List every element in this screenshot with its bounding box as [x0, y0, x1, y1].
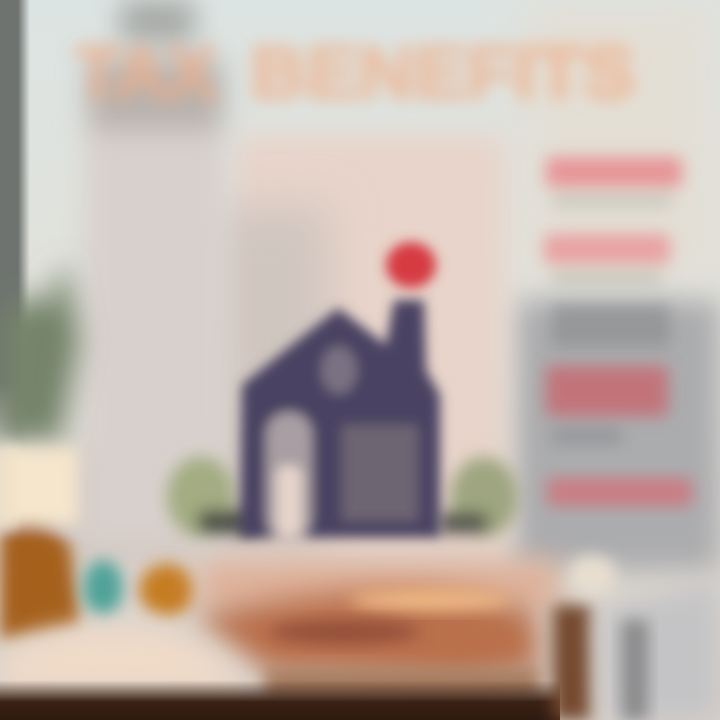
cloth fold — [622, 620, 648, 720]
amber ornament — [139, 564, 195, 616]
list item 2 — [544, 234, 670, 286]
dark bottom edge — [0, 680, 560, 720]
title: TAX — [76, 31, 216, 114]
title: BENEFITS — [250, 31, 635, 114]
list item 5 — [547, 478, 692, 506]
wooden post — [553, 605, 591, 720]
table surface — [200, 560, 560, 610]
vase left edge — [0, 450, 14, 524]
white cloth — [600, 580, 720, 720]
list item 1 — [546, 157, 682, 207]
list item 4 — [546, 366, 668, 444]
cloth highlight — [568, 555, 616, 595]
icon: left bush — [167, 457, 258, 537]
plant — [0, 260, 80, 440]
foreground: table and items — [0, 555, 720, 720]
vase — [0, 448, 80, 640]
title — [76, 31, 635, 114]
icon: house — [240, 300, 440, 540]
foreground: teal and amber ornaments — [83, 560, 195, 616]
teal ornament — [83, 560, 123, 616]
hand highlight — [350, 589, 510, 611]
book — [0, 626, 245, 690]
hand shadow — [270, 620, 420, 644]
icon: red heart balloon — [386, 242, 436, 288]
list item 3 — [552, 305, 670, 347]
benefits list — [544, 157, 692, 506]
lower table band — [265, 668, 540, 700]
orange hand shape — [195, 590, 540, 680]
illustration: house with bushes — [167, 242, 518, 540]
background tower — [85, 0, 225, 540]
icon: right bush — [438, 457, 518, 537]
foreground: plant and vase — [0, 260, 80, 640]
